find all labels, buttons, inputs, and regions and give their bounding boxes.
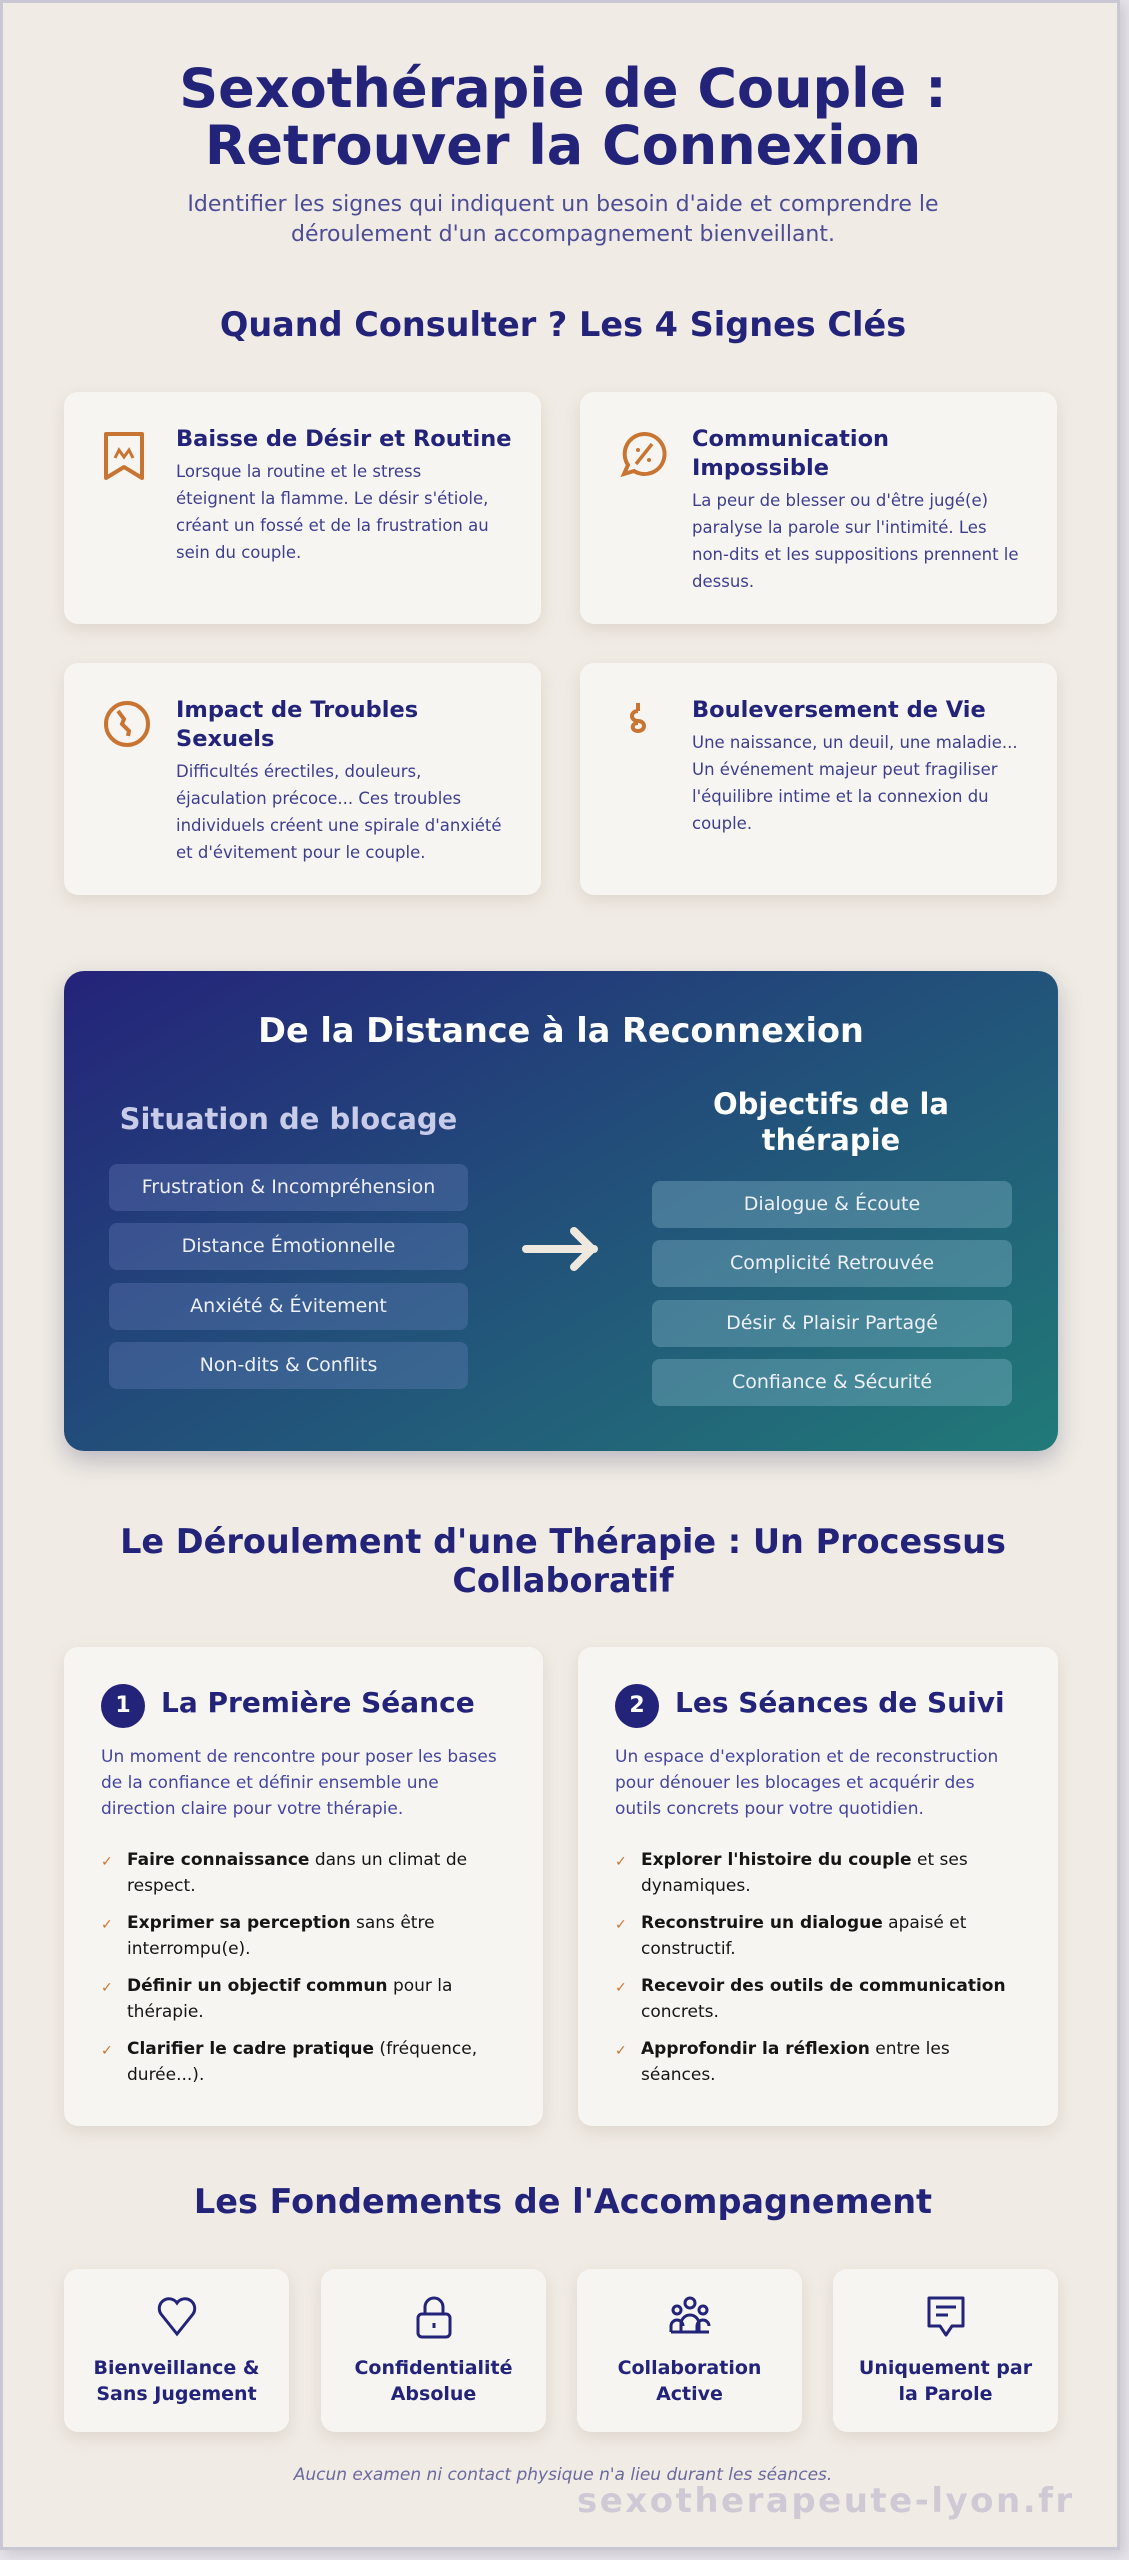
heading: déroulement: Le Déroulement d'une Thérapie : Un Processus Collaboratif — [120, 1522, 1006, 1600]
card: séances de suivi: Explorer l'histoire du couple et ses dynamiques. — [641, 1850, 968, 1896]
card: baisse de désir — [64, 392, 541, 624]
card: troubles — [64, 663, 541, 895]
card: collaboration — [577, 2269, 802, 2432]
card: confidentialité: Absolue — [391, 2383, 476, 2405]
card: baisse de désir: créant un fossé et de la frustration au — [176, 516, 489, 535]
icon: lock — [416, 2296, 452, 2338]
title: Retrouver la Connexion — [205, 114, 921, 177]
card: baisse de désir: Baisse de Désir et Routine — [176, 426, 512, 452]
pills: objectifs: Confiance & Sécurité — [732, 1371, 932, 1393]
footnote: Aucun examen ni contact physique n'a lieu durant les séances. — [294, 2465, 832, 2485]
card: bienveillance — [64, 2269, 289, 2432]
card: collaboration: Collaboration — [618, 2357, 761, 2379]
heading: signes: Quand Consulter ? Les 4 Signes Clés — [220, 305, 906, 344]
card: bouleversement — [580, 663, 1057, 895]
card: baisse de désir: sein du couple. — [176, 543, 301, 562]
pills: objectifs: Complicité Retrouvée — [730, 1252, 934, 1274]
icon: group — [670, 2296, 710, 2334]
card: première séance: La Première Séance — [161, 1686, 475, 1719]
icon: bookmark — [104, 432, 144, 480]
card: bouleversement: l'équilibre intime et la connexion du — [692, 787, 989, 806]
right header — [713, 1087, 949, 1157]
subtitle: Identifier les signes qui indiquent un besoin d'aide et comprendre le déroulement d'un accompagnement bienveillant. — [187, 192, 939, 247]
title: Sexothérapie de Couple : — [179, 57, 947, 120]
card: séances de suivi — [578, 1647, 1058, 2126]
card: communication: Impossible — [692, 455, 829, 481]
icon: speech no — [620, 432, 666, 478]
card: séances de suivi: 2 — [629, 1693, 645, 1718]
card: troubles: éjaculation précoce... Ces troubles — [176, 789, 461, 808]
card: bienveillance: Sans Jugement — [96, 2383, 257, 2405]
card: confidentialité — [321, 2269, 546, 2432]
card: collaboration: Active — [656, 2383, 723, 2405]
card: troubles: individuels créent une spirale d'anxiété — [176, 816, 501, 835]
right header: thérapie — [762, 1123, 900, 1157]
card: troubles: et d'évitement pour le couple. — [176, 843, 426, 862]
card: bouleversement: Un événement majeur peut fragiliser — [692, 760, 998, 779]
card: confidentialité: Confidentialité — [354, 2357, 513, 2379]
card: bouleversement: Une naissance, un deuil, une maladie... — [692, 733, 1018, 752]
pills: blocage: Non-dits & Conflits — [200, 1354, 377, 1376]
card: séances de suivi: Un espace d'exploration et de reconstruction pour dénouer les blocages et acquérir des outils concrets pour votre quotidien. — [615, 1747, 998, 1819]
pills: blocage: Distance Émotionnelle — [182, 1235, 395, 1257]
card: communication: La peur de blesser ou d'être jugé(e) — [692, 491, 988, 510]
left header: Situation de blocage — [120, 1102, 457, 1136]
card: première séance: Un moment de rencontre pour poser les bases de la confiance et définir ensemble une direction claire pour votre thérapie. — [101, 1747, 497, 1819]
card: séances de suivi: Les Séances de Suivi — [675, 1686, 1005, 1719]
card: séances de suivi: Reconstruire un dialogue apaisé et constructif. — [641, 1913, 966, 1959]
card: séances de suivi: Recevoir des outils de communication concrets. — [641, 1976, 1006, 2022]
card: parole — [833, 2269, 1058, 2432]
card: parole: la Parole — [898, 2383, 992, 2405]
pills: blocage: Anxiété & Évitement — [190, 1295, 387, 1317]
panel: distance to reconnexion — [64, 971, 1058, 1451]
icon: heart — [158, 2297, 196, 2336]
heading: fondements: Les Fondements de l'Accompagnement — [194, 2182, 932, 2221]
card: baisse de désir: Lorsque la routine et le stress — [176, 462, 421, 481]
card: première séance: Exprimer sa perception sans être interrompu(e). — [127, 1913, 435, 1959]
pills: blocage — [109, 1164, 468, 1389]
icon: message — [928, 2296, 964, 2337]
pills: objectifs: Dialogue & Écoute — [744, 1193, 920, 1215]
watermark: sexotherapeute-lyon.fr — [577, 2481, 1075, 2521]
card: communication: paralyse la parole sur l'intimité. Les — [692, 518, 987, 537]
card: première séance: Faire connaissance dans un climat de respect. — [127, 1850, 467, 1896]
card: bouleversement: Bouleversement de Vie — [692, 697, 986, 723]
card: bienveillance: Bienveillance & — [94, 2357, 259, 2379]
card: troubles: Difficultés érectiles, douleurs, — [176, 762, 421, 781]
card: première séance: Clarifier le cadre pratique (fréquence, durée...). — [127, 2039, 477, 2085]
right header: Objectifs de la — [713, 1087, 949, 1121]
card: première séance: 1 — [115, 1693, 131, 1718]
card: troubles: Sexuels — [176, 726, 274, 752]
card: séances de suivi: Approfondir la réflexion entre les séances. — [641, 2039, 950, 2085]
card: communication: dessus. — [692, 572, 754, 591]
card: parole: Uniquement par — [859, 2357, 1032, 2379]
card: bouleversement: couple. — [692, 814, 752, 833]
card: communication — [580, 392, 1057, 624]
card: première séance: Définir un objectif commun pour la thérapie. — [127, 1976, 452, 2022]
pills: blocage: Frustration & Incompréhension — [142, 1176, 435, 1198]
icon: broken clock — [104, 701, 150, 747]
panel title: De la Distance à la Reconnexion — [258, 1011, 864, 1050]
title — [179, 57, 947, 177]
icon: path — [630, 703, 646, 733]
card: baisse de désir: éteignent la flamme. Le désir s'étiole, — [176, 489, 488, 508]
arrow — [522, 1227, 598, 1271]
pills: objectifs: Désir & Plaisir Partagé — [726, 1312, 938, 1334]
card: première séance — [64, 1647, 543, 2126]
card: troubles: Impact de Troubles — [176, 697, 418, 723]
card: communication: Communication — [692, 426, 889, 452]
pills: objectifs — [652, 1181, 1012, 1406]
card: communication: non-dits et les suppositions prennent le — [692, 545, 1019, 564]
